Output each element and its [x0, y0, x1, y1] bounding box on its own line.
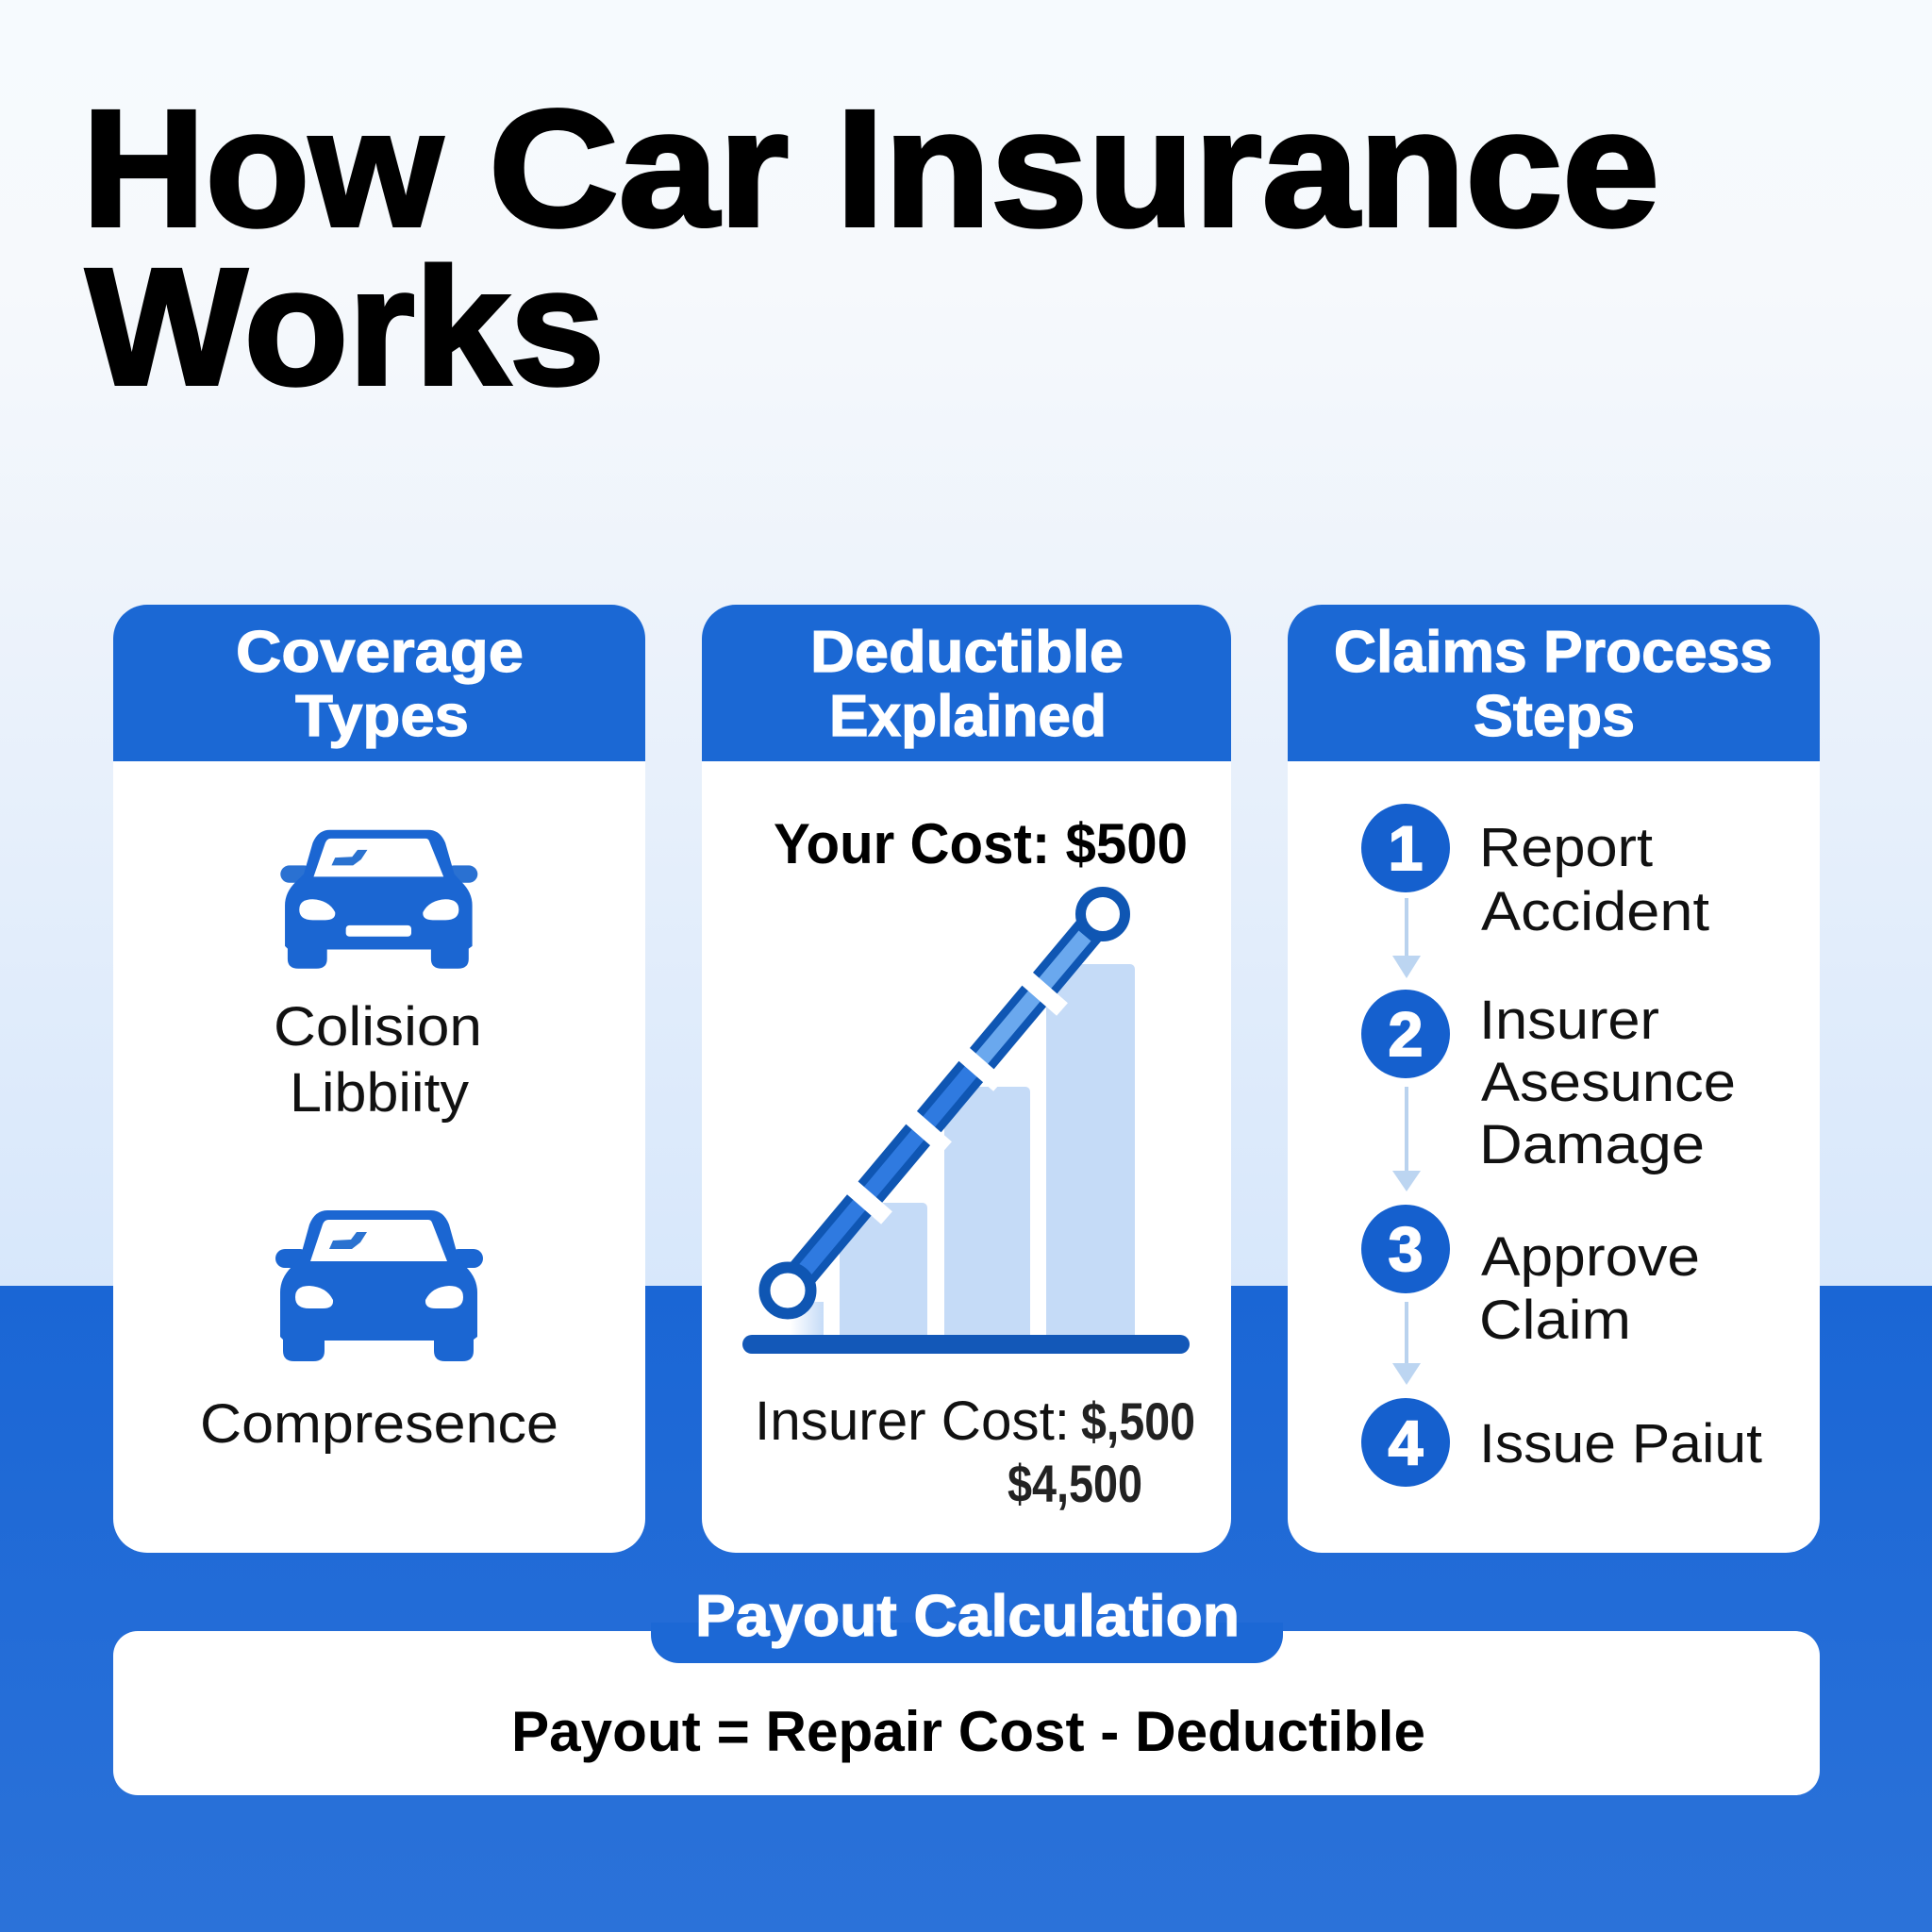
label: insurer cost: Insurer Cost: — [755, 1391, 1070, 1452]
step 1 — [1361, 804, 1709, 942]
heading: deductible explained: Deductible — [810, 620, 1124, 685]
tab: payout calculation heading: Payout Calculation — [695, 1584, 1240, 1649]
step 2 — [1361, 990, 1736, 1175]
step 4 — [1361, 1398, 1762, 1487]
label: your cost: Your Cost: $500 — [774, 812, 1188, 875]
panel: claims process steps — [1288, 605, 1820, 1553]
tab: payout calculation heading — [651, 1584, 1283, 1663]
heading: coverage types — [113, 605, 645, 761]
text: collision liability — [274, 996, 482, 1124]
formula: Payout = Repair Cost - Deductible — [511, 1700, 1425, 1763]
title: Works — [86, 235, 605, 420]
title: Insurance — [836, 76, 1659, 261]
arrow: step 2 to 3 — [1392, 1087, 1421, 1191]
step 3: Claim — [1479, 1290, 1631, 1351]
title: Car — [489, 76, 789, 261]
heading: coverage types: Types — [295, 684, 469, 749]
step 3: Approve — [1481, 1226, 1700, 1288]
panel: coverage types — [113, 605, 645, 1553]
step 2: Damage — [1479, 1114, 1705, 1175]
step 1: 1 — [1389, 813, 1423, 883]
label: insurer cost: $,500 — [1081, 1391, 1195, 1451]
heading: claims process steps — [1288, 605, 1820, 761]
heading: deductible explained — [702, 605, 1231, 761]
icon: car two — [275, 1210, 483, 1361]
step 2: 2 — [1389, 999, 1423, 1069]
icon: car one — [280, 830, 477, 969]
label: insurer cost — [755, 1391, 1195, 1513]
step 2: Insurer — [1479, 990, 1659, 1051]
step 2: Asesunce — [1481, 1052, 1736, 1113]
heading: coverage types: Coverage — [236, 620, 524, 685]
step 4: Issue Paiut — [1479, 1413, 1762, 1474]
text: collision liability: Colision — [274, 996, 482, 1058]
heading: claims process steps: Steps — [1474, 684, 1635, 749]
label: insurer cost: $4,500 — [1008, 1454, 1142, 1513]
bar chart — [742, 964, 1190, 1354]
step 1: Report — [1479, 817, 1653, 878]
step 3: 3 — [1389, 1214, 1423, 1284]
panel: deductible explained — [702, 605, 1231, 1553]
title — [82, 76, 1659, 420]
text: collision liability: Libbiity — [290, 1062, 469, 1124]
diagonal line with end markers — [764, 892, 1124, 1313]
arrow: step 3 to 4 — [1392, 1302, 1421, 1385]
step 3 — [1361, 1205, 1700, 1351]
panel: payout calculation — [113, 1584, 1820, 1795]
heading: deductible explained: Explained — [829, 684, 1107, 749]
step 4: 4 — [1389, 1407, 1424, 1477]
title: How — [82, 76, 443, 261]
step 1: Accident — [1481, 881, 1709, 942]
arrow: step 1 to 2 — [1392, 898, 1421, 978]
heading: claims process steps: Claims Process — [1334, 620, 1773, 685]
text: comprehensive: Compresence — [200, 1393, 558, 1455]
